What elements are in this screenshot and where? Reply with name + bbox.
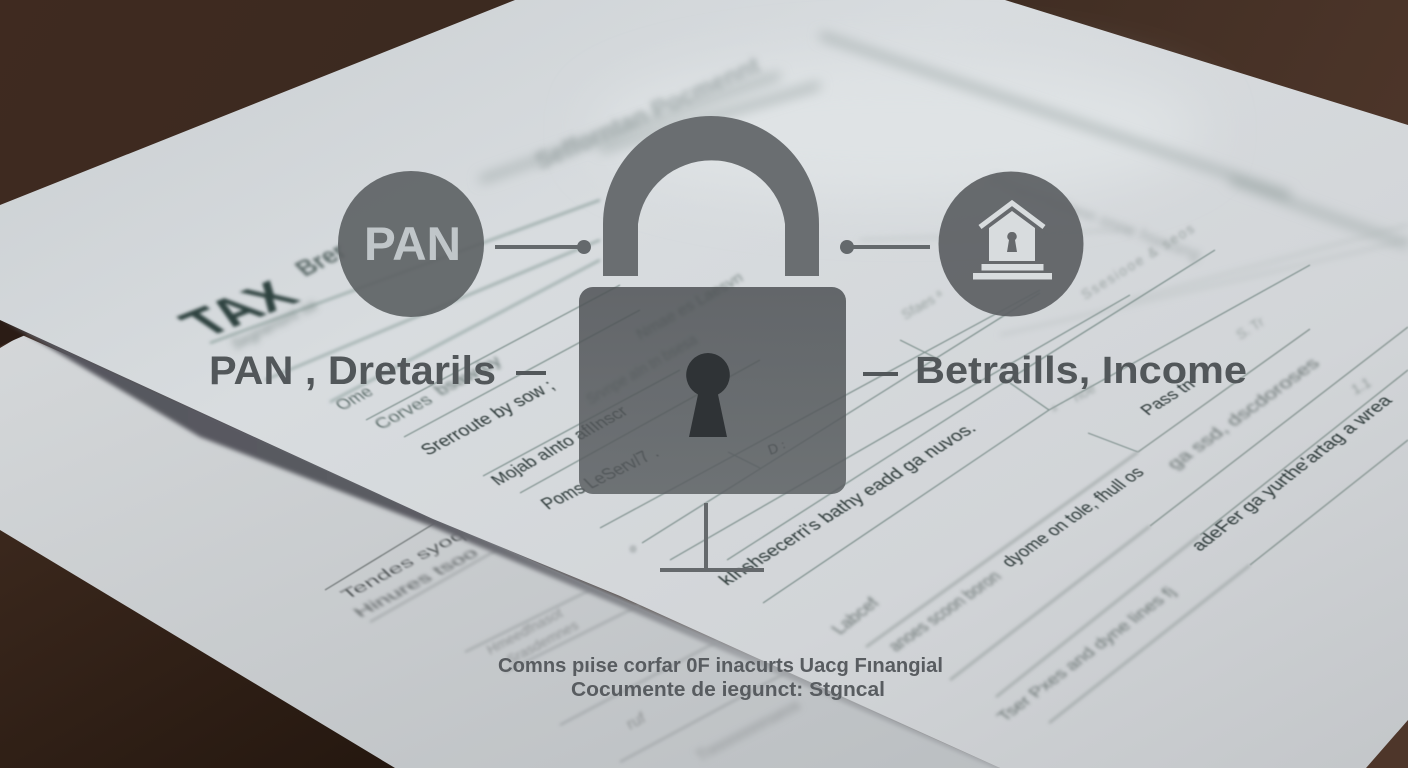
printed form text: Segneriont sa [229, 296, 320, 354]
printed form text: S. Tr [1233, 313, 1267, 343]
printed form text: Mojab aInto afIInscr [486, 402, 632, 489]
printed form text: Srvnpe aIn tn bsesa [584, 331, 701, 408]
secure house badge [938, 172, 1084, 316]
printed form text: ᵃ ˑ ˑ noe [1048, 380, 1098, 418]
right connector [840, 240, 930, 254]
printed form text: Srerroute by sow ; [415, 376, 559, 459]
printed form text: ᵒ [630, 543, 636, 560]
form heading: TAX: TAX [167, 274, 312, 345]
PAN badge [338, 171, 484, 317]
right label: Betraills, Income [915, 350, 1247, 392]
form heading: TAX: Brer [290, 239, 354, 281]
printed form text: bsaw by [429, 352, 506, 399]
printed form text: adeFer ga yurthe'artag a wrea [1186, 391, 1397, 554]
under sheet form text: ruf [624, 709, 649, 734]
left connector [495, 240, 591, 254]
printed form text: Poms LeServ/7 . [536, 443, 663, 513]
padlock stand [660, 503, 764, 572]
printed form text: Nmae es Laesvn [634, 269, 746, 343]
caption: Comns pıise corfar 0F inacurts Uacg Fınangial [498, 655, 943, 677]
padlock keyhole [686, 353, 730, 437]
left label: PAN , Dretarils [209, 349, 496, 393]
printed form text: D ꞉ [766, 437, 788, 458]
under sheet form text: Hmeedfnasot [484, 604, 565, 658]
under sheet of paper [0, 318, 1000, 768]
under sheet form text [337, 527, 803, 766]
under sheet form text: Srasdemnes [504, 617, 581, 668]
printed form text: dyome on tole, fhull os [996, 463, 1148, 570]
form heading: TAX [167, 239, 354, 345]
under sheet form text: Hinures tsoo [350, 545, 482, 621]
printed form text: Labcef [826, 594, 884, 637]
form rule lines [210, 35, 1408, 723]
printed form text: Ssesiooe & seos [1078, 220, 1197, 303]
under sheet form text: Tnnnnnnnnseos [694, 697, 803, 766]
caption [498, 655, 943, 701]
printed form text: 1.1 [1348, 374, 1374, 398]
central padlock [579, 116, 846, 572]
padlock shackle [603, 116, 819, 276]
printed form text: anoes scoon boron [883, 568, 1006, 654]
caption: Cocumente de iegunct: Stgncal [571, 679, 885, 701]
under sheet form text: Tendes syoq [337, 527, 469, 603]
printed form text: Corves [369, 390, 437, 433]
printed form text [167, 52, 1397, 724]
printed form text: Tser Pxes and dyne lines fj [993, 584, 1180, 724]
printed form text: Ome [330, 382, 377, 414]
printed form text: ga ssd, dscdoroses [1162, 354, 1324, 472]
printed form text: Sfaes ᵃ [898, 286, 946, 323]
top sheet shadow [0, 318, 1000, 768]
printed form text: Prrsenntatiann onne hsessng [989, 171, 1203, 264]
padlock body [579, 287, 846, 494]
printed form text: kInshsecerri's bathy eadd ga nuvos. [714, 418, 980, 589]
PAN badge: PAN [364, 217, 461, 270]
printed form text: Pass tn [1135, 375, 1199, 419]
icon: house with keyhole [973, 203, 1052, 280]
printed form text: Sefforntan Pocmennt [531, 52, 764, 175]
